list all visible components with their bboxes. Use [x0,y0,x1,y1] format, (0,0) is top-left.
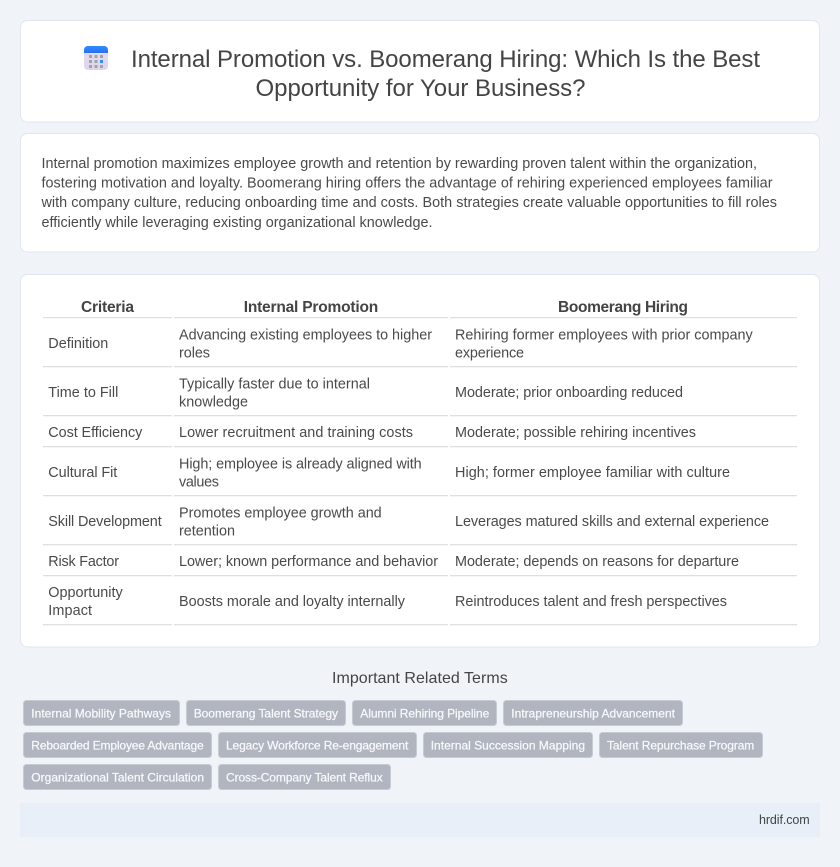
row: skill development [43,506,797,545]
table header row: Internal Promotion [244,299,378,316]
tag: Alumni Rehiring Pipeline [352,700,496,726]
row: time to fill: Typically faster due to internal [179,376,370,392]
row: cultural fit: values [179,474,219,490]
row: risk factor: Moderate; depends on reasons for departure [455,554,739,570]
row: skill development: retention [179,524,235,540]
tag: Legacy Workforce Re-engagement [218,732,416,758]
intro paragraph: with company culture, reducing onboarding time and costs. Both strategies create valuable opportunities to fill roles [40,195,777,211]
tag: Reboarded Employee Advantage [24,732,212,758]
title: Opportunity for Your Business? [256,75,586,102]
row: skill development: Leverages matured skills and external experience [455,514,769,530]
row: time to fill [43,376,797,416]
row: cultural fit: High; former employee familiar with culture [455,465,730,481]
title: Internal Promotion vs. Boomerang Hiring: Which Is the Best [131,46,760,73]
row: definition: experience [455,346,524,362]
row: definition: Definition [48,336,108,352]
row: risk factor [43,554,797,576]
intro paragraph [40,156,777,231]
row: time to fill: Time to Fill [48,385,118,401]
row: definition: Advancing existing employees to higher [179,328,432,344]
row: risk factor: Risk Factor [48,554,119,570]
title [131,46,760,102]
row: opportunity impact: Opportunity [48,585,123,601]
row: opportunity impact [43,585,797,625]
row: time to fill: knowledge [179,394,248,410]
footer [20,803,820,837]
row: opportunity impact: Reintroduces talent and fresh perspectives [455,594,727,610]
row: risk factor: Lower; known performance and behavior [179,554,438,570]
tag: Talent Repurchase Program: Talent Repurchase Program [607,738,754,752]
icon: calendar [84,46,108,70]
row: skill development: Promotes employee growth and [179,506,382,522]
row: opportunity impact: Boosts morale and loyalty internally [179,594,406,610]
row: cost efficiency: Cost Efficiency [48,425,143,441]
tag: Reboarded Employee Advantage: Reboarded Employee Advantage [31,738,204,752]
tag: Legacy Workforce Re-engagement: Legacy Workforce Re-engagement [226,738,409,752]
tag: Internal Succession Mapping [424,732,592,758]
tag: Organizational Talent Circulation [24,764,212,790]
row: cost efficiency: Moderate; possible rehiring incentives [455,425,696,441]
row: definition: roles [179,346,210,362]
tag: Cross-Company Talent Reflux: Cross-Company Talent Reflux [226,770,383,784]
row: opportunity impact: Impact [48,603,92,619]
row: cultural fit: High; employee is already aligned with [179,456,422,472]
tag: Intrapreneurship Advancement: Intrapreneurship Advancement [511,706,676,720]
row: definition [43,328,797,367]
heading: related terms: Important Related Terms [332,670,508,687]
row: cultural fit: Cultural Fit [48,465,117,481]
intro paragraph: Internal promotion maximizes employee growth and retention by rewarding proven talent within the organization, [42,156,757,172]
row: cost efficiency: Lower recruitment and training costs [179,425,413,441]
row: cost efficiency [43,425,797,447]
tag: Internal Mobility Pathways [24,700,180,726]
tag: Internal Succession Mapping: Internal Succession Mapping [431,738,585,752]
tag: Cross-Company Talent Reflux [218,764,390,790]
tag: Talent Repurchase Program [600,732,762,758]
table header row: Boomerang Hiring [558,299,688,316]
tag list: related terms [24,700,762,790]
row: skill development: Skill Development [48,514,162,530]
intro paragraph: efficiently while leveraging existing organizational knowledge. [42,215,432,231]
row: time to fill: Moderate; prior onboarding reduced [455,385,683,401]
intro paragraph: fostering motivation and loyalty. Boomerang hiring offers the advantage of rehiring experienced employees familiar [42,176,773,192]
footer source text: hrdif.com [759,813,810,827]
panel: comparison table [20,274,820,647]
tag: Intrapreneurship Advancement [504,700,682,726]
panel: introduction [20,134,820,252]
tag: Internal Mobility Pathways: Internal Mobility Pathways [31,706,171,720]
panel: header [20,20,820,122]
table header row: Criteria [81,299,134,316]
row: definition: Rehiring former employees with prior company [455,328,753,344]
tag: Boomerang Talent Strategy: Boomerang Talent Strategy [194,706,338,720]
table header row [43,299,797,318]
tag: Boomerang Talent Strategy [186,700,346,726]
tag: Alumni Rehiring Pipeline: Alumni Rehiring Pipeline [360,706,490,720]
row: cultural fit [43,456,797,496]
tag: Organizational Talent Circulation: Organizational Talent Circulation [31,770,204,784]
